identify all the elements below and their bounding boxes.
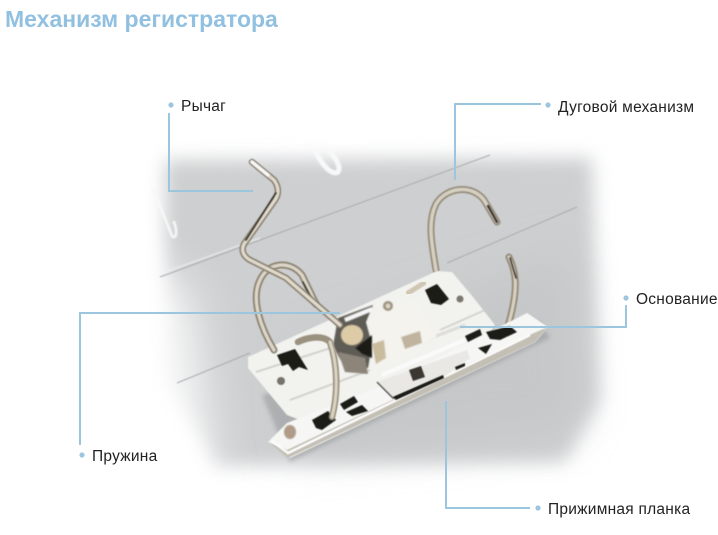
title: Механизм регистратора (5, 6, 278, 32)
callout: Пружина (79, 313, 340, 465)
lever (243, 162, 340, 325)
folder edge lines (160, 155, 577, 383)
callout: Дуговой механизм (455, 99, 694, 180)
callout: Рычаг (168, 98, 253, 191)
lower surface darker tone (300, 250, 580, 455)
front arch wire (256, 265, 336, 417)
photo: binder mechanism (120, 150, 600, 490)
raised plate (377, 340, 470, 398)
callout: Прижимная планка (446, 401, 690, 518)
pressure bar (268, 313, 548, 458)
callout: Дуговой механизм: Дуговой механизм (558, 99, 694, 116)
callout: Прижимная планка: Прижимная планка (548, 501, 690, 518)
small rear spindle link (408, 283, 424, 293)
rear arch wire (431, 189, 516, 326)
callout: Основание: Основание (636, 291, 718, 308)
photo background: grey folder surface (165, 158, 600, 466)
shadow under the mechanism (262, 322, 550, 462)
central spring housing (333, 301, 437, 374)
rust speck on bar tip (284, 425, 296, 439)
callout: Пружина: Пружина (92, 448, 158, 465)
callout: Рычаг: Рычаг (181, 98, 226, 115)
callout: Основание (460, 291, 718, 327)
rivet and slot holes (277, 284, 517, 430)
plate mottling (256, 310, 485, 400)
base plate (248, 271, 495, 420)
left side white fade (120, 250, 215, 490)
background paper clips, white (153, 150, 339, 237)
